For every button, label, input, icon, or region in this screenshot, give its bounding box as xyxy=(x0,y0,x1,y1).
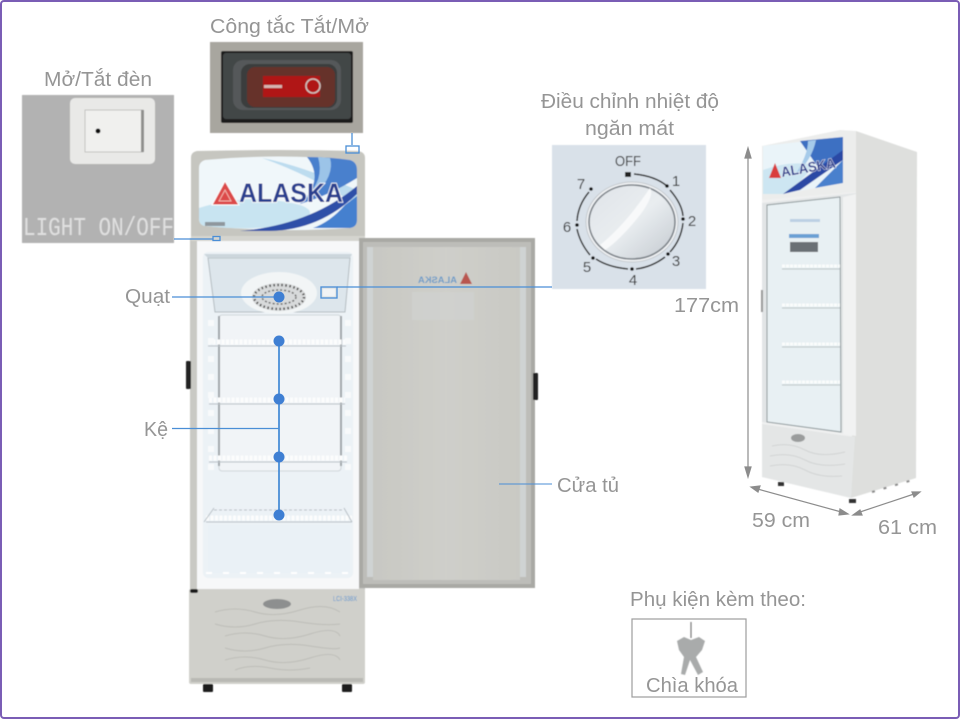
right fridge product view xyxy=(761,130,917,503)
label: accessories: Phụ kiện kèm theo: xyxy=(630,589,806,611)
label: depth: 61 cm xyxy=(878,517,937,539)
thermostat panel xyxy=(552,145,706,289)
depth arrow xyxy=(853,492,920,515)
label: fan: Quạt xyxy=(125,286,170,308)
right fridge base xyxy=(762,424,916,503)
fridge header with logo xyxy=(191,150,365,241)
dial knob xyxy=(586,182,678,262)
accessory box xyxy=(632,619,746,697)
width arrow xyxy=(751,486,848,515)
right fridge logo: ALASKA xyxy=(780,155,837,180)
dial numbers: 3 xyxy=(672,253,680,270)
base grille xyxy=(189,589,365,692)
label: power switch: Công tắc Tắt/Mở xyxy=(210,15,369,38)
height arrow xyxy=(745,148,751,477)
switch callout xyxy=(346,133,359,153)
label: keys: Chìa khóa xyxy=(646,675,739,697)
label: light switch: Mở/Tắt đèn xyxy=(44,68,152,91)
dial numbers: 5 xyxy=(583,259,591,276)
right fridge door xyxy=(761,193,856,436)
left handle xyxy=(186,361,191,389)
label: door: Cửa tủ xyxy=(557,475,619,497)
dial numbers: 7 xyxy=(577,176,585,193)
light label: LIGHT ON/OFF xyxy=(23,213,174,243)
right fridge logo xyxy=(763,137,843,194)
mirrored logo xyxy=(417,272,472,285)
shelves xyxy=(204,320,352,522)
fridge cabinet xyxy=(190,238,365,590)
label: thermostat xyxy=(541,91,719,140)
power switch panel xyxy=(210,42,363,133)
dial numbers: 2 xyxy=(688,213,696,230)
dial numbers: 6 xyxy=(563,219,571,236)
dial numbers xyxy=(563,153,696,289)
main fridge opened xyxy=(186,150,538,692)
door inner panel xyxy=(373,247,520,580)
fan cover xyxy=(204,254,352,314)
label: thermostat: Điều chỉnh nhiệt độ xyxy=(541,91,719,113)
thermostat callout xyxy=(321,287,552,298)
model number: LCI-338X xyxy=(333,596,357,603)
dimension arrows xyxy=(745,148,920,515)
label: height: 177cm xyxy=(674,295,739,317)
side face xyxy=(851,131,917,498)
door handle xyxy=(533,373,538,400)
dial dots xyxy=(575,184,685,271)
red rocker xyxy=(263,76,320,97)
callout dots xyxy=(274,292,284,520)
front body xyxy=(762,192,856,498)
open door xyxy=(359,238,538,588)
dial numbers: OFF xyxy=(615,153,641,170)
mirrored logo: ALASKA xyxy=(417,275,457,285)
logo triangle xyxy=(212,181,239,205)
door callout xyxy=(499,483,552,485)
brand text: ALASKA xyxy=(239,178,343,208)
callout lines xyxy=(172,133,552,515)
dial arcs xyxy=(577,174,683,269)
label: width: 59 cm xyxy=(752,510,810,532)
icon: keys xyxy=(677,622,705,675)
light callout xyxy=(174,236,220,240)
label: thermostat: ngăn mát xyxy=(585,118,674,140)
feet xyxy=(190,589,352,692)
logo panel xyxy=(199,156,357,231)
dial numbers: 4 xyxy=(629,272,637,289)
shelf callout xyxy=(172,341,279,515)
top edge xyxy=(762,130,856,210)
fan callout xyxy=(172,296,279,298)
light switch panel xyxy=(22,95,174,243)
label: shelf: Kệ xyxy=(144,419,168,441)
fridge interior xyxy=(197,241,359,589)
dial numbers: 1 xyxy=(672,173,680,190)
